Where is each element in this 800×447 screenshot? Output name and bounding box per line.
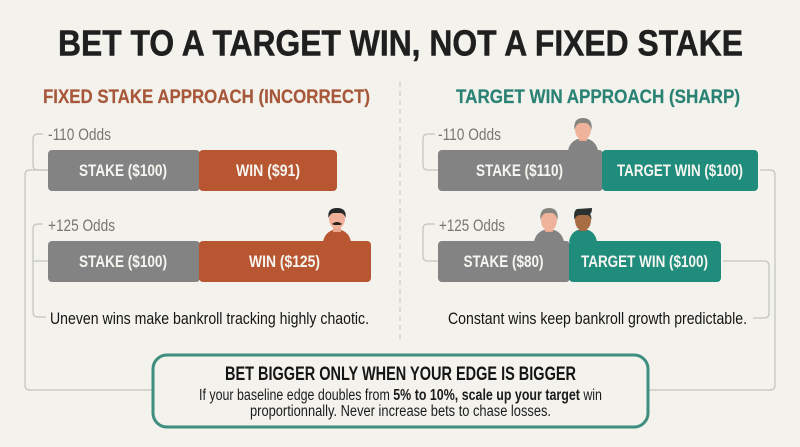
heading: fixed stake approach: FIXED STAKE APPROACH (INCORRECT)	[43, 86, 370, 108]
bar: win $91	[199, 150, 337, 191]
bar: stake $100, +125: STAKE ($100)	[79, 253, 167, 271]
callout body: proportionnally. Never increase bets to chase losses.	[250, 403, 551, 420]
bar: win $91: WIN ($91)	[236, 162, 300, 180]
callout: bet bigger	[153, 355, 648, 427]
bar: win $125: WIN ($125)	[249, 253, 320, 271]
panel: target win approach	[438, 86, 758, 328]
icon: dark-haired man, target win	[569, 208, 597, 242]
label: -110 odds: -110 Odds	[438, 126, 501, 144]
heading: target win approach: TARGET WIN APPROACH (SHARP)	[456, 86, 740, 108]
bar: stake $110	[438, 150, 603, 191]
label: +125 odds: +125 Odds	[48, 217, 115, 235]
bar: stake $100, -110: STAKE ($100)	[79, 162, 167, 180]
bar: stake $110: STAKE ($110)	[476, 162, 563, 180]
icon: grey-haired man, stake	[534, 208, 564, 242]
note: uneven wins: Uneven wins make bankroll tracking highly chaotic.	[50, 310, 369, 328]
bar: stake $80	[438, 241, 570, 282]
connector: right group	[423, 134, 775, 390]
bar: target win $100, -110	[602, 150, 758, 191]
connector: left group	[25, 134, 152, 390]
callout body	[199, 387, 602, 420]
label: -110 odds: -110 Odds	[48, 126, 111, 144]
note: constant wins: Constant wins keep bankroll growth predictable.	[448, 310, 747, 328]
bar: stake $100, +125	[48, 241, 200, 282]
bar: stake $100, -110	[48, 150, 200, 191]
icon: man with moustache	[323, 208, 351, 242]
label: +125 odds: +125 Odds	[439, 217, 505, 235]
callout body: If your baseline edge doubles from 5% to 10%, scale up your target win	[199, 387, 602, 404]
bar: win $125	[199, 241, 371, 282]
icon: grey-haired man, stake	[568, 118, 598, 151]
bar: target win $100, -110: TARGET WIN ($100)	[617, 162, 743, 180]
callout heading: BET BIGGER ONLY WHEN YOUR EDGE IS BIGGER	[225, 364, 576, 385]
bar: stake $80: STAKE ($80)	[464, 253, 544, 271]
bar: target win $100, +125: TARGET WIN ($100)	[581, 253, 708, 271]
bar: target win $100, +125	[569, 241, 721, 282]
panel: fixed stake approach	[43, 86, 371, 328]
